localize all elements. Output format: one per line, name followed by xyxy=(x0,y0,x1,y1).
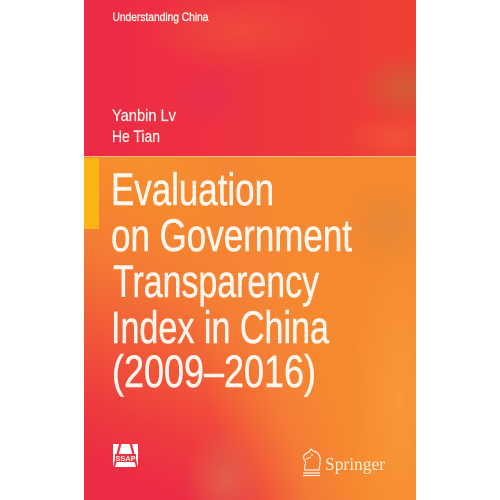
panel: lower orange cover area xyxy=(84,157,416,500)
divider line between panels xyxy=(84,156,416,157)
authors xyxy=(112,106,176,146)
title xyxy=(111,164,352,397)
authors: Yanbin Lv xyxy=(112,106,176,125)
yellow tab xyxy=(84,158,99,229)
authors: He Tian xyxy=(112,127,160,146)
icon: SSAP logo xyxy=(113,444,138,467)
title: Index in China xyxy=(111,302,330,353)
title: Evaluation xyxy=(111,164,274,215)
series name: Understanding China xyxy=(112,10,209,24)
icon: SSAP logo: SSAP xyxy=(116,456,136,463)
publisher name: Springer xyxy=(325,454,385,474)
icon: Springer chess knight xyxy=(303,449,320,476)
panel: upper red cover area xyxy=(84,0,416,156)
title: on Government xyxy=(111,210,352,261)
title: Transparency xyxy=(113,256,319,307)
title: (2009–2016) xyxy=(112,346,316,397)
